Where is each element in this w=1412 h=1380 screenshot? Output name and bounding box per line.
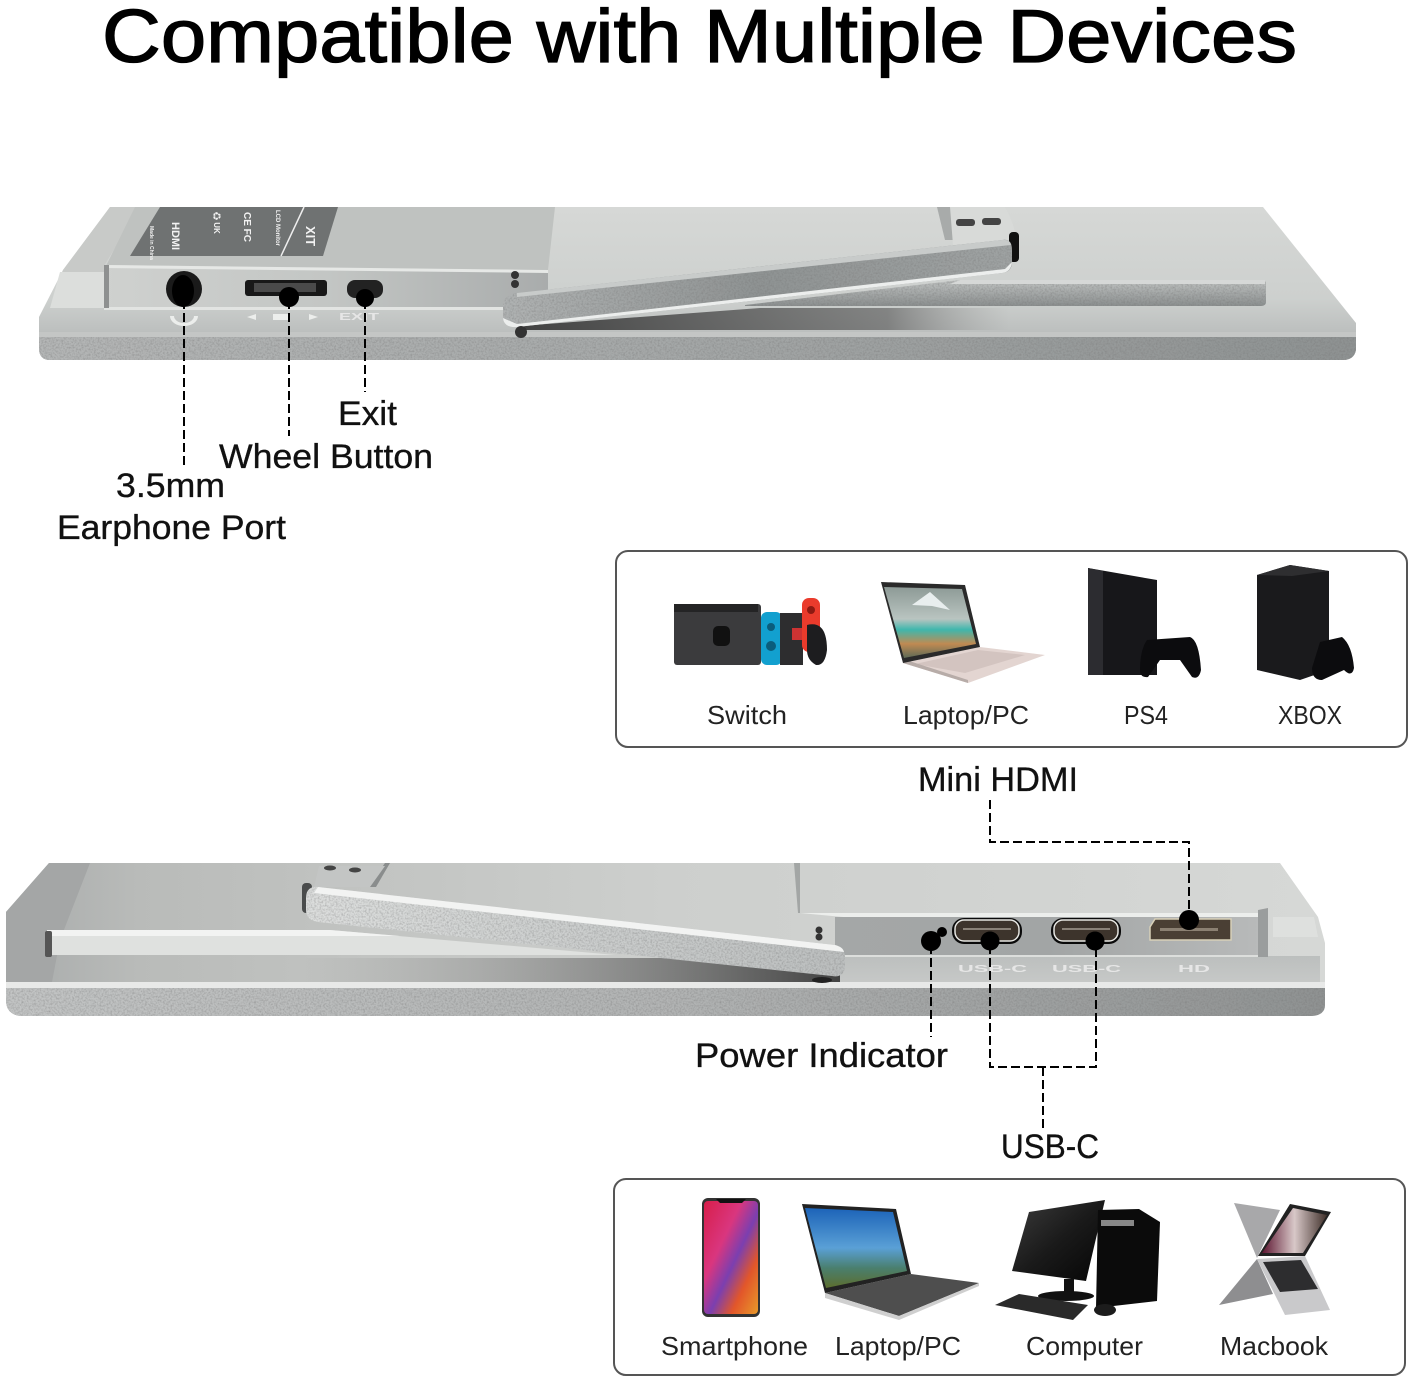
rating label: CE FC — [241, 212, 252, 242]
bar behind kickstand — [745, 280, 1266, 306]
port marker dots — [921, 910, 1199, 951]
back panel — [104, 207, 555, 270]
port print labels: USB-C — [1052, 964, 1121, 975]
rating label: XIT — [303, 226, 318, 246]
label: Switch: Switch — [707, 700, 787, 730]
side wall with ports — [104, 265, 548, 308]
product photo: monitor left side with controls — [39, 207, 1356, 360]
icon: 3.5mm earphone jack — [166, 271, 202, 307]
shadow under kickstand — [520, 308, 1010, 330]
panel: HDMI compatible devices — [616, 551, 1407, 747]
port panel top and side wall — [800, 913, 1262, 917]
rating label: Made in China — [148, 226, 154, 260]
icon: desktop computer — [995, 1200, 1160, 1320]
label: XBOX: XBOX — [1278, 700, 1342, 730]
callout lines: top controls — [184, 300, 365, 465]
icon: wheel button — [245, 280, 327, 307]
label: PS4: PS4 — [1124, 700, 1168, 730]
label: Smartphone: Smartphone — [661, 1331, 808, 1361]
callout lines: ports — [931, 800, 1189, 1130]
label: Laptop/PC: Laptop/PC — [903, 700, 1029, 730]
icon: Macbook — [1219, 1203, 1331, 1315]
product photo: monitor right side with ports — [6, 863, 1325, 1016]
ledge print — [170, 312, 379, 326]
label: Wheel Button: Wheel Button — [219, 438, 433, 476]
shadow under kickstand — [300, 958, 840, 982]
label: USB-C: USB-C — [1001, 1128, 1099, 1166]
icon: exit button — [347, 280, 383, 307]
ledge print: EXIT — [339, 312, 379, 323]
icon: smartphone — [702, 1198, 760, 1317]
icon: Xbox console and controller — [1257, 565, 1354, 680]
icon: laptop — [802, 1204, 979, 1320]
rating label: HDMI — [169, 222, 181, 250]
label: Computer: Computer — [1026, 1331, 1143, 1361]
icon: Nintendo Switch — [674, 598, 827, 665]
label: 3.5mm Earphone Port — [57, 467, 287, 547]
label: Macbook: Macbook — [1220, 1331, 1329, 1361]
port print labels: USB-C — [958, 964, 1027, 975]
label: Mini HDMI: Mini HDMI — [918, 761, 1078, 799]
icon: PS4 console and controller — [1088, 568, 1201, 678]
panel: USB-C compatible devices — [614, 1179, 1405, 1375]
port print labels — [958, 964, 1210, 975]
Mini HDMI port — [1150, 919, 1231, 940]
label: Laptop/PC: Laptop/PC — [835, 1331, 961, 1361]
label: 3.5mm Earphone Port: Earphone Port — [57, 509, 287, 547]
icon: laptop PC — [881, 582, 1045, 683]
label: Exit: Exit — [338, 395, 398, 433]
rating label: LCD Monitor — [274, 210, 280, 247]
rating label: ♻ UK — [212, 212, 221, 234]
label: Power Indicator: Power Indicator — [695, 1037, 948, 1075]
USB-C port 1 — [952, 918, 1022, 944]
bar behind kickstand — [47, 930, 616, 955]
label: 3.5mm Earphone Port: 3.5mm — [116, 467, 225, 505]
kickstand — [302, 863, 845, 983]
kickstand — [503, 207, 1019, 338]
rating label — [130, 207, 338, 260]
USB-C port 2 — [1051, 918, 1121, 944]
port print labels: HD — [1178, 964, 1210, 975]
